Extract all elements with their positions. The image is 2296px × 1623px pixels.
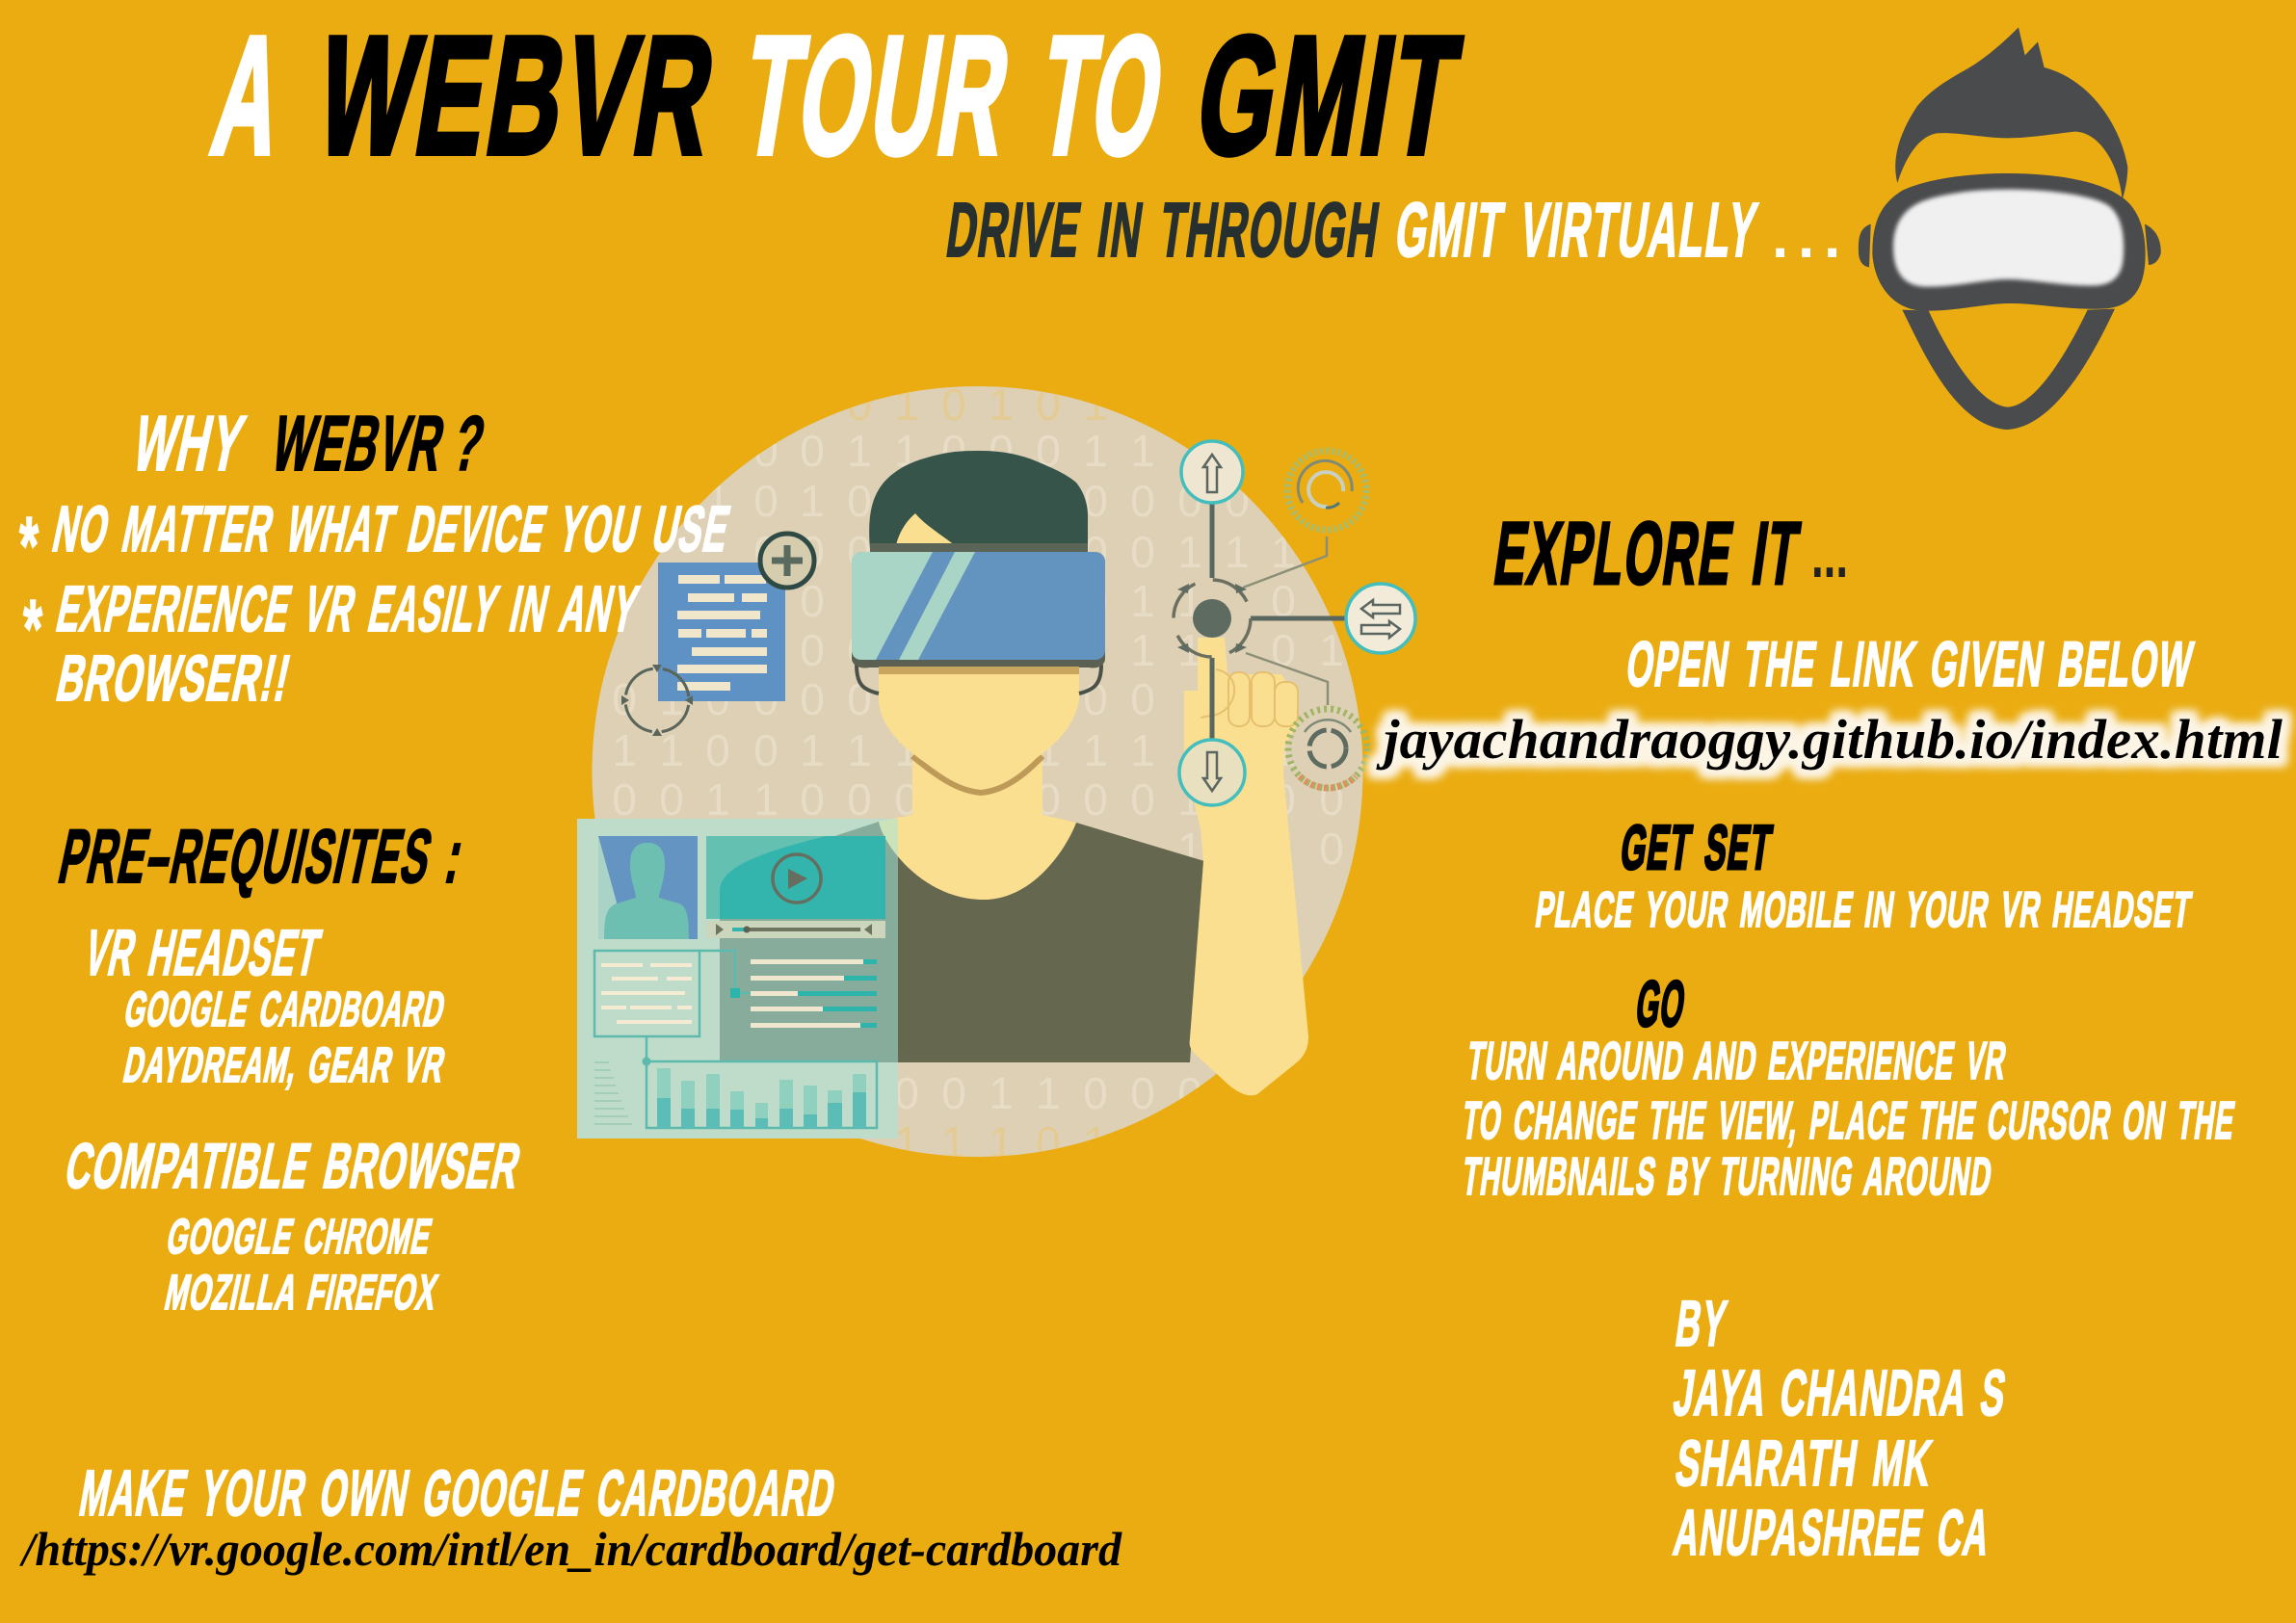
compatible browser list: COMPATIBLE BROWSER	[60, 1132, 527, 1202]
bottom gauge	[1288, 709, 1367, 788]
panel overlay	[577, 819, 898, 1139]
background circle	[592, 386, 1362, 1157]
navigation lines	[1212, 504, 1346, 742]
gauge connectors	[1243, 537, 1328, 705]
subtitle: DRIVE IN THROUGH	[941, 187, 1386, 274]
heading: why webvr: WHY	[126, 401, 252, 487]
binary digits: 10	[1177, 824, 1344, 874]
heading: why webvr	[126, 401, 493, 487]
step: go: GO	[1632, 968, 1690, 1040]
bullet points: NO MATTER WHAT DEVICE YOU USE	[47, 494, 737, 565]
bullet points: BROWSER!!	[51, 643, 298, 715]
binary digits: 001100011	[753, 426, 1155, 476]
plus button	[760, 534, 814, 588]
control dot	[1193, 599, 1231, 638]
logo ear tabs	[1859, 224, 2161, 267]
control ring	[1174, 580, 1251, 657]
hair fringe	[896, 513, 955, 545]
panel backing	[577, 819, 898, 1139]
step: go	[1459, 968, 2239, 1206]
hair	[869, 451, 1088, 549]
headset tan band	[879, 667, 1079, 674]
forearm and fist	[1184, 638, 1308, 1095]
title: WEBVR	[306, 3, 729, 190]
link: tour url: jayachandraoggy.github.io/index.html	[1376, 708, 2283, 771]
section: explore it	[1376, 503, 2283, 1206]
headset top band	[870, 543, 1088, 553]
binary digits: 11001111111	[612, 725, 1296, 775]
down button	[1179, 740, 1245, 805]
heading: explore it: ...	[1811, 519, 1848, 590]
credits	[1670, 1288, 2011, 1569]
heading: make your own: MAKE YOUR OWN GOOGLE CARDBOARD	[74, 1457, 841, 1530]
heading: pre-requisites: PRE–REQUISITES	[52, 814, 440, 899]
bullet points: *	[19, 501, 40, 592]
top gauge	[1287, 451, 1366, 530]
chin shadow	[912, 756, 1042, 793]
dashboard panel	[577, 819, 898, 1139]
logo hair	[1895, 27, 2127, 199]
heading: why webvr: WEBVR	[265, 401, 453, 487]
binary digits: 0011000000100	[612, 774, 1344, 825]
video controls	[706, 921, 885, 938]
binary digits: 010000000	[612, 674, 1296, 724]
compatible browser list: GOOGLE CHROME	[163, 1209, 437, 1264]
fingers	[1228, 672, 1298, 726]
logo goggles frame	[1872, 173, 2146, 311]
compatible browser list	[60, 1132, 527, 1320]
section: make your own cardboard	[18, 1457, 1122, 1576]
compatible browser list: MOZILLA FIREFOX	[161, 1265, 443, 1320]
vr headset list	[79, 918, 451, 1092]
section: pre-requisites	[52, 814, 527, 1320]
bullet points: EXPERIENCE VR EASILY IN ANY	[51, 574, 646, 645]
up button	[1181, 441, 1243, 503]
title: GMIT	[1186, 3, 1473, 190]
thumb fold	[1201, 669, 1234, 718]
neck	[879, 742, 1076, 900]
bar chart	[647, 1061, 877, 1128]
heading: explore it: EXPLORE IT	[1489, 503, 1807, 603]
headset glass	[852, 552, 933, 660]
refresh dashed circle	[621, 665, 693, 736]
binary digits: 001101	[800, 625, 1344, 675]
heading: why webvr: ?	[446, 401, 493, 487]
binary digits: 11101	[894, 1117, 1108, 1167]
logo chin strap	[1902, 309, 2115, 430]
binary digits	[612, 380, 1344, 1167]
headset visor	[852, 552, 1105, 660]
binary digits: 00000111	[753, 527, 1296, 577]
swap button	[1346, 584, 1415, 653]
ring markers	[1177, 584, 1247, 653]
credits: JAYA CHANDRA S	[1670, 1357, 2011, 1429]
binary digits: 010101	[847, 380, 1108, 430]
face	[879, 665, 1079, 784]
photo tile	[598, 836, 698, 939]
heading: explore it	[1489, 503, 1848, 603]
shirt	[720, 822, 1204, 1062]
heading: pre-requisites	[52, 814, 472, 899]
bullet points	[19, 494, 737, 715]
list rows	[751, 959, 877, 1028]
section: why webvr	[19, 401, 737, 715]
headset lower band	[852, 647, 1105, 668]
vr headset list: VR HEADSET	[79, 918, 328, 989]
vr headset list: DAYDREAM, GEAR VR	[119, 1037, 451, 1092]
subtitle: ...	[1772, 204, 1840, 271]
connectors	[647, 951, 751, 1061]
binary digits: 101010000	[705, 476, 1250, 526]
credits: SHARATH MK	[1672, 1427, 1937, 1500]
glasses temples	[857, 665, 1101, 694]
step: get set: GET SET	[1617, 812, 1777, 882]
binary digits: 100110	[659, 576, 1296, 626]
side ticks	[594, 1062, 632, 1124]
link: cardboard: /https://vr.google.com/intl/en_in/cardboard/get-cardboard	[18, 1522, 1122, 1576]
title: TO	[1029, 3, 1178, 190]
subtitle: GMIT VIRTUALLY	[1390, 187, 1763, 274]
logo goggles lens	[1893, 190, 2124, 287]
document card	[658, 563, 785, 701]
heading: pre-requisites: :	[438, 814, 472, 899]
binary digits: 0011000	[894, 1068, 1202, 1118]
title: TOUR	[732, 3, 1024, 190]
text box	[594, 951, 699, 1036]
bullet points: *	[23, 584, 44, 675]
vr headset list: GOOGLE CARDBOARD	[120, 982, 451, 1036]
credits: ANUPASHREE CA	[1670, 1497, 1994, 1569]
icon: VR head logo	[1859, 27, 2161, 430]
headset stripe	[899, 552, 975, 660]
step: get set	[1532, 812, 2195, 938]
title: A	[202, 3, 298, 190]
title	[202, 3, 1473, 190]
video tile	[706, 836, 885, 919]
illustration: VR user with interface	[577, 380, 1415, 1167]
credits: BY	[1672, 1288, 1731, 1360]
